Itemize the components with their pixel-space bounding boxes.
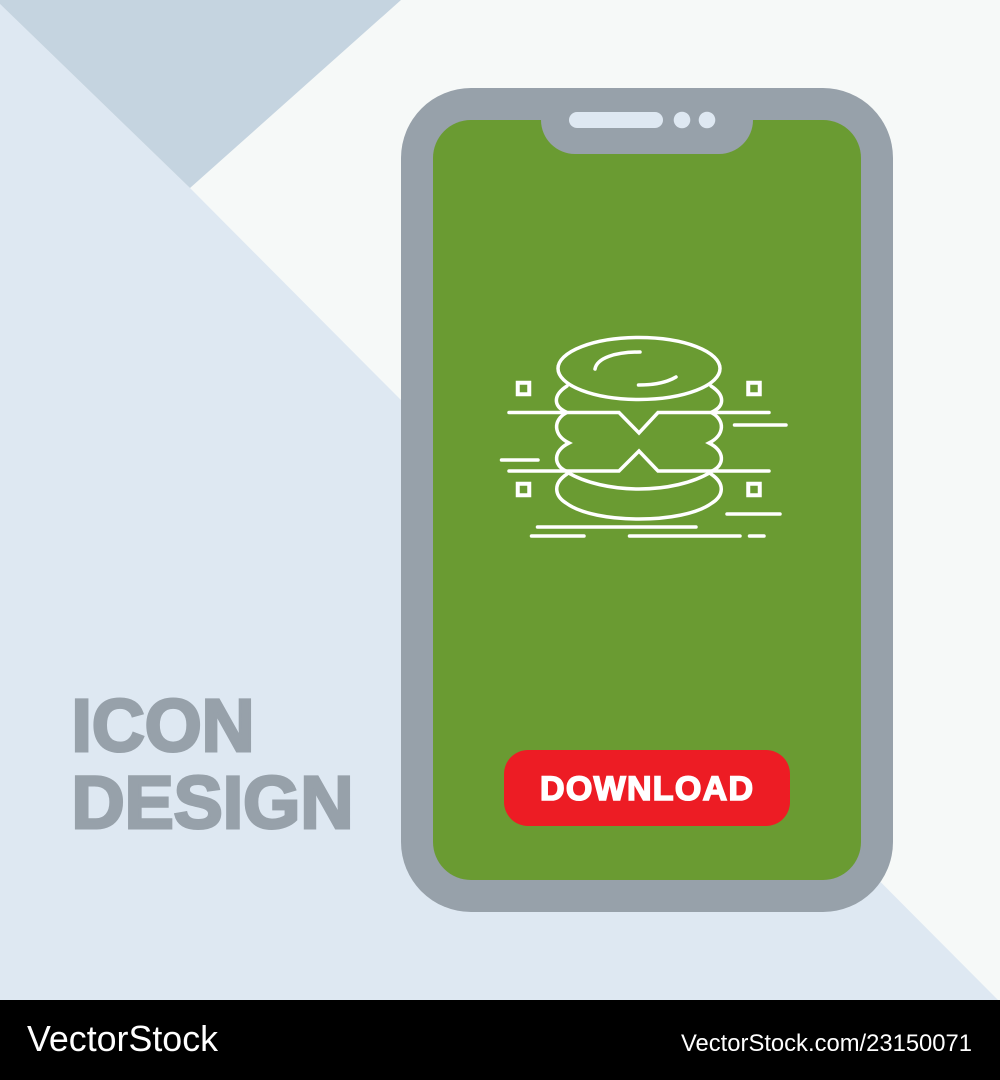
camera dot right: [699, 112, 715, 128]
phone notch: [541, 118, 753, 154]
heading: icon design: DESIGN: [72, 761, 354, 844]
icon: database stack: [502, 338, 786, 536]
bottom disc: [557, 474, 721, 519]
phone body: [401, 88, 893, 912]
motion lines: [734, 423, 786, 427]
heading: icon design: [72, 684, 354, 844]
download button: [504, 750, 790, 826]
footer image id: VectorStock.com/23150071: [681, 1030, 972, 1057]
lower divider: [509, 451, 769, 471]
button background: [504, 750, 790, 826]
middle layer right: [709, 413, 721, 471]
bottom disc upper rim: [567, 472, 711, 489]
phone screen: [433, 120, 861, 880]
second layer: [556, 386, 567, 412]
heading: icon design: ICON: [72, 684, 254, 767]
speaker: [569, 112, 663, 128]
top disc: [558, 338, 720, 400]
camera dot left: [674, 112, 690, 128]
upper divider: [509, 412, 769, 433]
disc highlights: [595, 352, 640, 369]
footer brand: VectorStock: [27, 1018, 219, 1059]
middle layer left: [557, 413, 569, 471]
small squares: [518, 383, 529, 394]
background triangle: darker blue: [0, 0, 401, 188]
button label: DOWNLOAD: [540, 770, 753, 808]
phone mockup: [401, 88, 893, 912]
footer bar: [0, 1000, 1000, 1080]
footer background: [0, 1000, 1000, 1080]
